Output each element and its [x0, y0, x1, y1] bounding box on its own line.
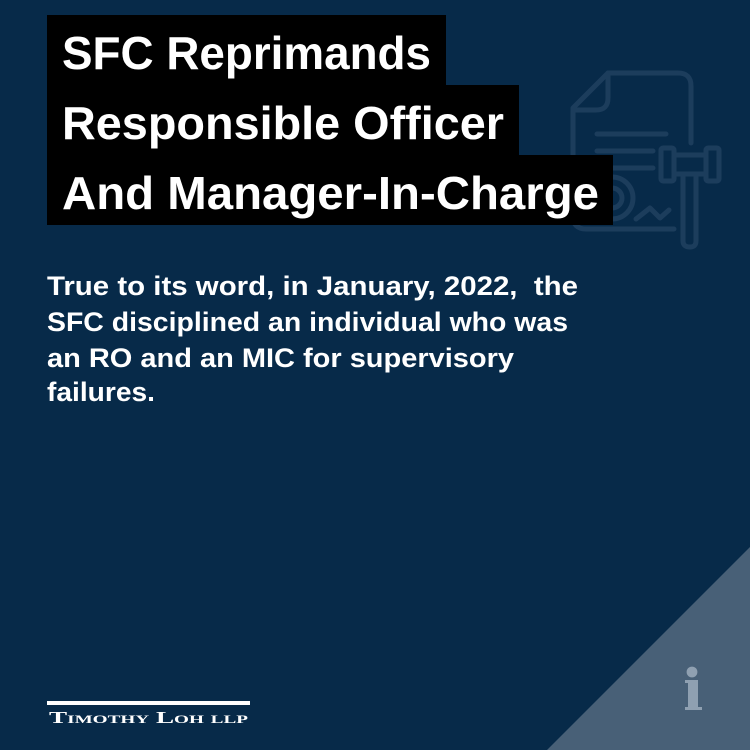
title	[47, 15, 613, 225]
icon: document with gavel	[573, 73, 719, 247]
body text: an RO and an MIC for supervisory	[47, 343, 514, 373]
logo: Timothy Loh LLP	[47, 701, 250, 727]
logo: Timothy Loh LLP: Timothy Loh llp	[49, 708, 248, 727]
title line 3: And Manager-In-Charge	[62, 167, 599, 219]
corner triangle	[547, 547, 750, 750]
body text: True to its word, in January, 2022, the	[47, 271, 578, 301]
icon: info	[685, 667, 702, 710]
body text	[47, 271, 578, 407]
body text: SFC disciplined an individual who was	[47, 307, 568, 337]
title line 2	[47, 85, 519, 155]
body text: failures.	[47, 377, 155, 407]
title line 1	[47, 15, 446, 85]
title line 1: SFC Reprimands	[62, 27, 431, 79]
title line 3	[47, 155, 613, 225]
title line 2: Responsible Officer	[62, 97, 504, 149]
